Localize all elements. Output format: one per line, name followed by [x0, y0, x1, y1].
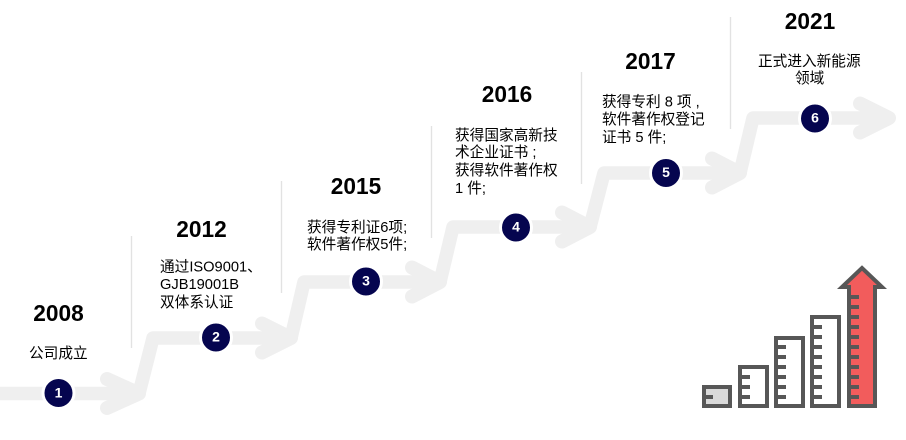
milestone 2016 — [455, 81, 558, 243]
milestone 2012: 通过ISO9001、 — [160, 258, 262, 276]
milestone 2017 — [602, 48, 705, 188]
milestone 2021: 领域 — [795, 70, 825, 87]
milestone 2008: 1 — [55, 384, 63, 400]
milestone 2015: 2015 — [331, 173, 381, 199]
milestone 2016: 4 — [512, 218, 520, 234]
milestone 2012: 2 — [212, 328, 220, 344]
milestone 2015 — [307, 173, 407, 297]
milestone 2021: 2021 — [785, 8, 835, 34]
milestone 2016: 获得国家高新技 — [455, 127, 558, 144]
milestone 2017: 2017 — [625, 48, 676, 74]
milestone 2015: 3 — [362, 272, 370, 288]
milestone 2021: 正式进入新能源 — [758, 53, 861, 70]
milestone 2017: 获得专利 8 项 , — [602, 94, 700, 110]
icon: rising bar chart with arrow — [704, 268, 882, 406]
milestone 2008 — [29, 300, 88, 408]
milestone 2008: 2008 — [33, 300, 84, 326]
milestone 2016: 1 件; — [455, 180, 486, 197]
milestone 2021: 6 — [811, 110, 819, 126]
milestone 2015: 获得专利证6项; — [307, 219, 407, 236]
milestone 2017: 5 — [662, 164, 670, 180]
milestone 2008: 公司成立 — [29, 345, 88, 362]
milestone 2015: 软件著作权5件; — [307, 236, 407, 253]
milestone 2017: 证书 5 件; — [602, 129, 666, 146]
milestone 2016: 2016 — [482, 81, 532, 107]
milestone 2016: 获得软件著作权 — [455, 162, 558, 179]
milestone 2016: 术企业证书 ; — [455, 143, 536, 161]
milestone 2012: 双体系认证 — [160, 294, 234, 311]
stepped growth arrow path — [0, 104, 889, 408]
milestone 2012 — [160, 216, 262, 353]
milestone 2021 — [758, 8, 861, 134]
milestone 2017: 软件著作权登记 — [602, 111, 705, 128]
dividers — [132, 17, 730, 348]
milestone 2012: GJB19001B — [160, 277, 239, 293]
milestone 2012: 2012 — [176, 216, 227, 242]
